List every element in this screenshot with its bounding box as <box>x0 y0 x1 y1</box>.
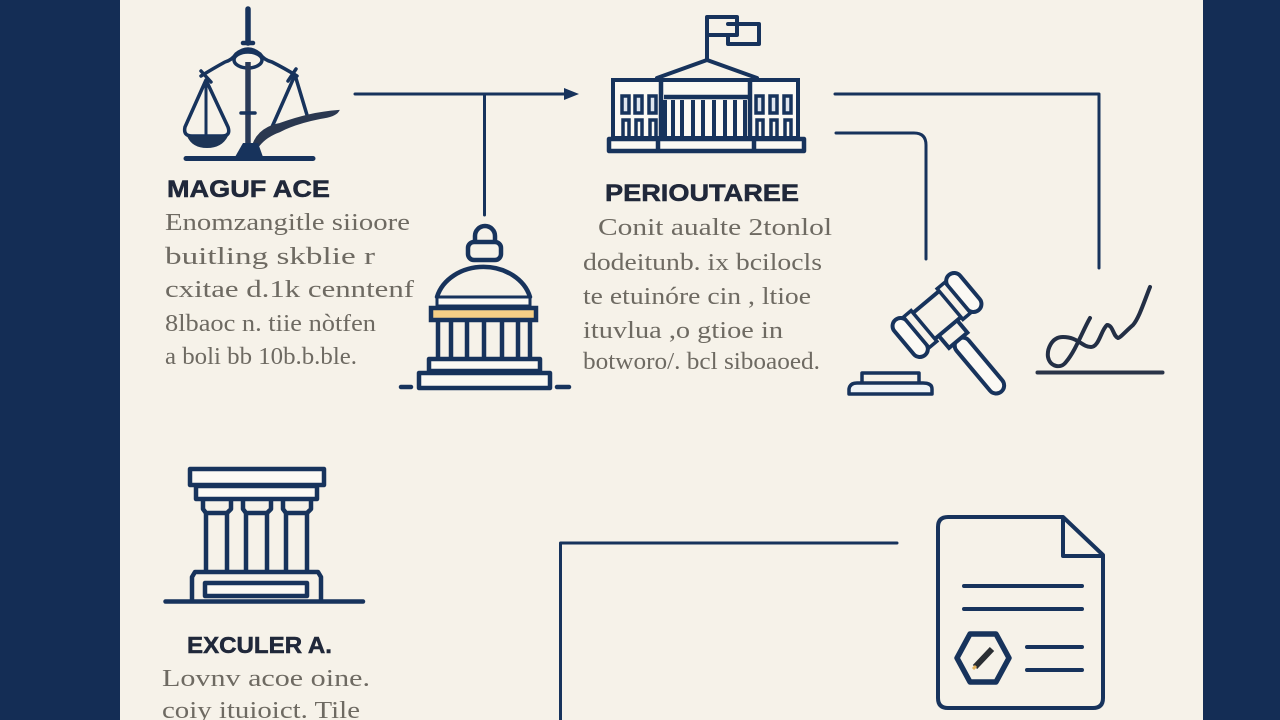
text block: left column: buitling skblie r <box>165 244 375 270</box>
connector: parliament to gavel <box>836 133 926 259</box>
text block: left column: 8lbaoc n. tiie nòtfen <box>165 311 376 337</box>
icon: classical columns <box>166 469 363 602</box>
icon: signature <box>1038 287 1162 372</box>
text block: center column <box>583 215 832 375</box>
text block: center column: ituvlua ,o gtioe in <box>583 318 783 344</box>
text block: left column: Enomzangitle siioore <box>165 210 410 236</box>
text block: left column: cxitae d.1k cenntenf <box>165 277 414 303</box>
icon: parliament with flag <box>609 17 804 151</box>
text block: center column: dodeitunb. ix bcilocls <box>583 250 822 276</box>
heading: lower left: EXCULER A. <box>187 632 332 658</box>
heading: center column: PERIOUTAREE <box>605 180 799 207</box>
connector: parliament to signature <box>835 94 1099 268</box>
icon: scales of justice <box>185 9 338 158</box>
text block: lower left: Lovnv acoe oine. <box>162 666 370 692</box>
icon: signed document <box>938 517 1103 708</box>
heading: left column: MAGUF ACE <box>167 176 330 203</box>
text block: lower left <box>162 666 370 720</box>
connector: lower frame <box>560 543 897 720</box>
connector: arrow to capitol <box>483 95 486 215</box>
text block: left column <box>165 210 414 370</box>
text block: left column: a boli bb 10b.b.ble. <box>165 344 357 370</box>
text block: center column: botworo/. bcl siboaoed. <box>583 349 820 375</box>
text block: center column: te etuinóre cin , ltioe <box>583 284 811 310</box>
icon: gavel <box>849 270 1034 419</box>
arrow: scales to parliament <box>355 88 579 100</box>
text block: center column: Conit aualte 2tonlol <box>598 215 832 241</box>
icon: capitol dome <box>401 226 569 388</box>
